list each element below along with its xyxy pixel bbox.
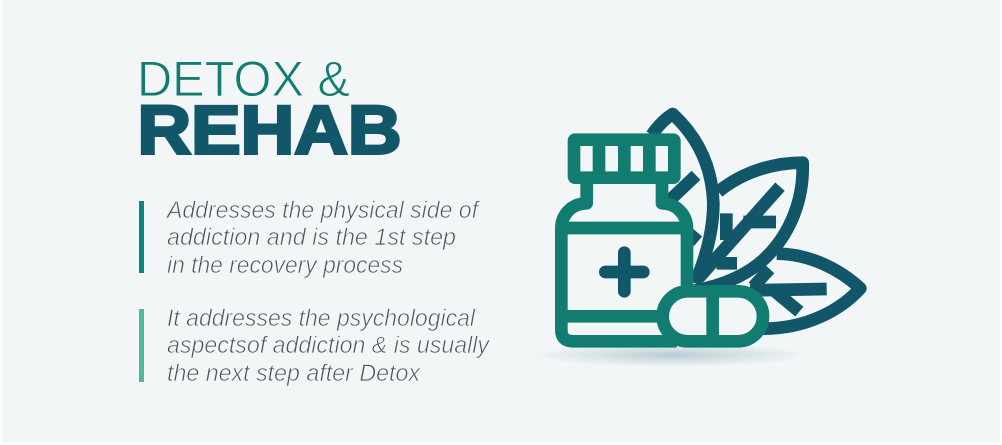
text block: rehab description: It addresses the psychological bbox=[167, 305, 476, 332]
accent bar: detox bbox=[139, 201, 144, 273]
icon: ground shadow bbox=[533, 343, 810, 367]
icon: bottle bbox=[561, 140, 687, 341]
text block: detox description bbox=[165, 197, 480, 279]
text block: detox description: addiction and is the 1st step bbox=[167, 224, 456, 251]
title: REHAB: REHAB bbox=[138, 92, 402, 168]
text block: rehab description bbox=[167, 305, 491, 387]
accent bar: rehab bbox=[139, 309, 144, 382]
text block: rehab description: the next step after Detox bbox=[167, 360, 421, 387]
title: DETOX &: DETOX & bbox=[137, 51, 350, 107]
text block: detox description: in the recovery process bbox=[167, 252, 403, 279]
icon: medical cross bbox=[605, 253, 643, 291]
text block: rehab description: aspectsof addiction & is usually bbox=[167, 332, 491, 359]
icon: medicine bottle, pill and leaves bbox=[533, 114, 860, 367]
text block: detox description: Addresses the physical side of bbox=[165, 197, 480, 224]
icon: middle leaf bbox=[693, 163, 803, 291]
icon: right leaf bbox=[750, 254, 860, 329]
icon: top leaf bbox=[652, 114, 713, 283]
icon: capsule pill bbox=[663, 291, 763, 341]
